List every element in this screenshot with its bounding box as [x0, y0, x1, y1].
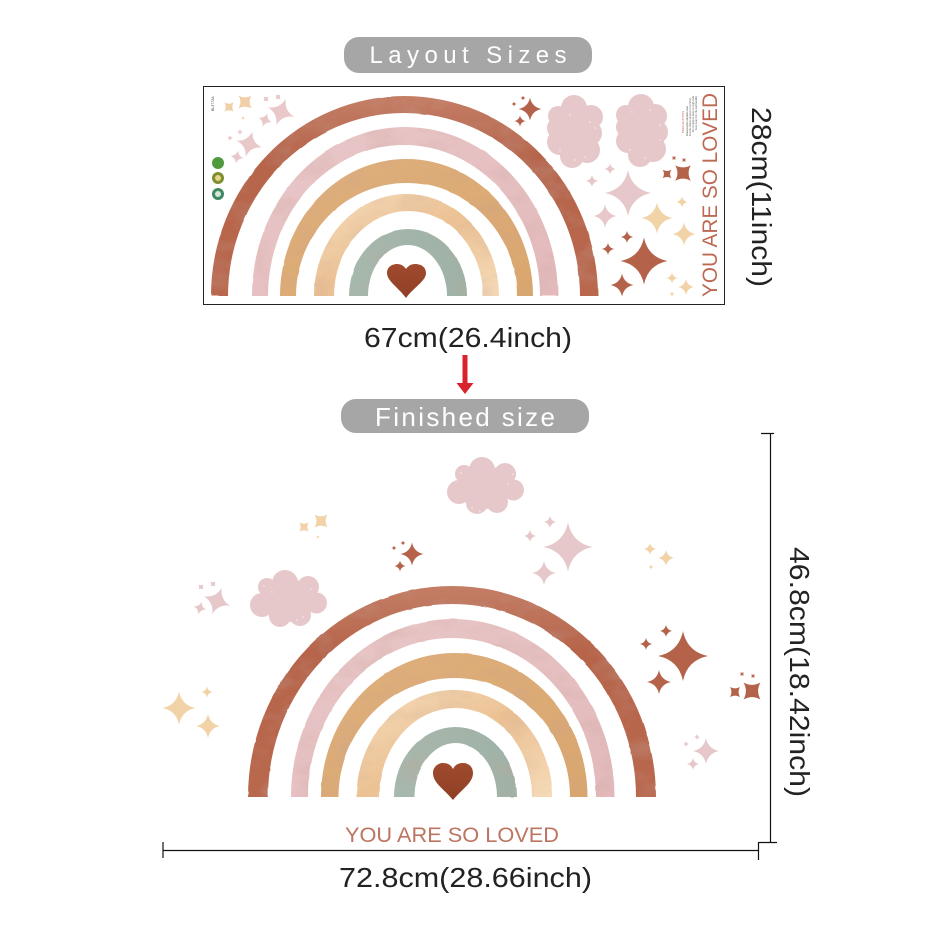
stars: small tan cluster: [295, 508, 334, 539]
heading pill: Layout Sizes: Layout Sizes: [370, 42, 566, 69]
heading pill: Finished size: [341, 399, 589, 433]
precautions note: Peel the sticker and press it on firmly: [689, 97, 692, 136]
dimension label: sheet width: 67cm(26.4inch): [364, 322, 572, 353]
stars: right side group: [586, 154, 699, 296]
stars: top left group: [220, 89, 299, 165]
dimension line: finished width: [163, 842, 759, 860]
precautions note: Do not apply to damp or rough walls: [692, 95, 695, 132]
dimension label: sheet height: 28cm(11inch): [746, 107, 777, 287]
stars: pink cluster left: [192, 579, 235, 619]
heading pill: Finished size: Finished size: [375, 402, 555, 432]
cloud sticker one: [547, 95, 603, 168]
dimension line: finished height: [759, 433, 777, 842]
stars: small dark cluster: [392, 540, 424, 572]
cloud sticker two: [616, 94, 668, 167]
stars: pink cluster lower right: [683, 734, 719, 770]
icons: green certification badges: [212, 157, 224, 200]
stars: dark cluster far right: [725, 670, 769, 708]
dimension label: finished height: 46.8cm(18.42inch): [784, 547, 815, 797]
dimension label: finished width: 72.8cm(28.66inch): [339, 862, 592, 893]
precautions note: Keep away from fire and humidity: [695, 95, 698, 130]
cloud: left: [250, 570, 327, 627]
rainbow: finished wall decal: [248, 586, 656, 797]
heading pill: Layout Sizes: [344, 37, 592, 73]
stars: dark group above clouds: [512, 96, 542, 126]
rainbow: layout sheet: [211, 96, 598, 296]
precautions note: Please keep the wall surface clean: [686, 105, 689, 136]
product code: BL3772A: [211, 96, 215, 111]
cloud: top: [447, 457, 524, 514]
icon: heart on layout sheet: [387, 264, 426, 298]
precautions note: PRECAUTIONS: [681, 111, 685, 133]
panel: sticker layout sheet: [204, 86, 724, 304]
vertical slogan: YOU ARE SO LOVED: [699, 93, 722, 297]
precautions note: [681, 95, 698, 136]
icon: heart on finished decal: [433, 763, 473, 800]
arrow: red down arrow: [456, 355, 474, 394]
stars: large pink cluster: [524, 516, 592, 585]
stars: tan cluster left: [162, 686, 220, 738]
stars: small tan cluster right: [644, 543, 674, 570]
slogan under rainbow: YOU ARE SO LOVED: [345, 824, 559, 847]
stars: large dark cluster: [640, 625, 708, 694]
